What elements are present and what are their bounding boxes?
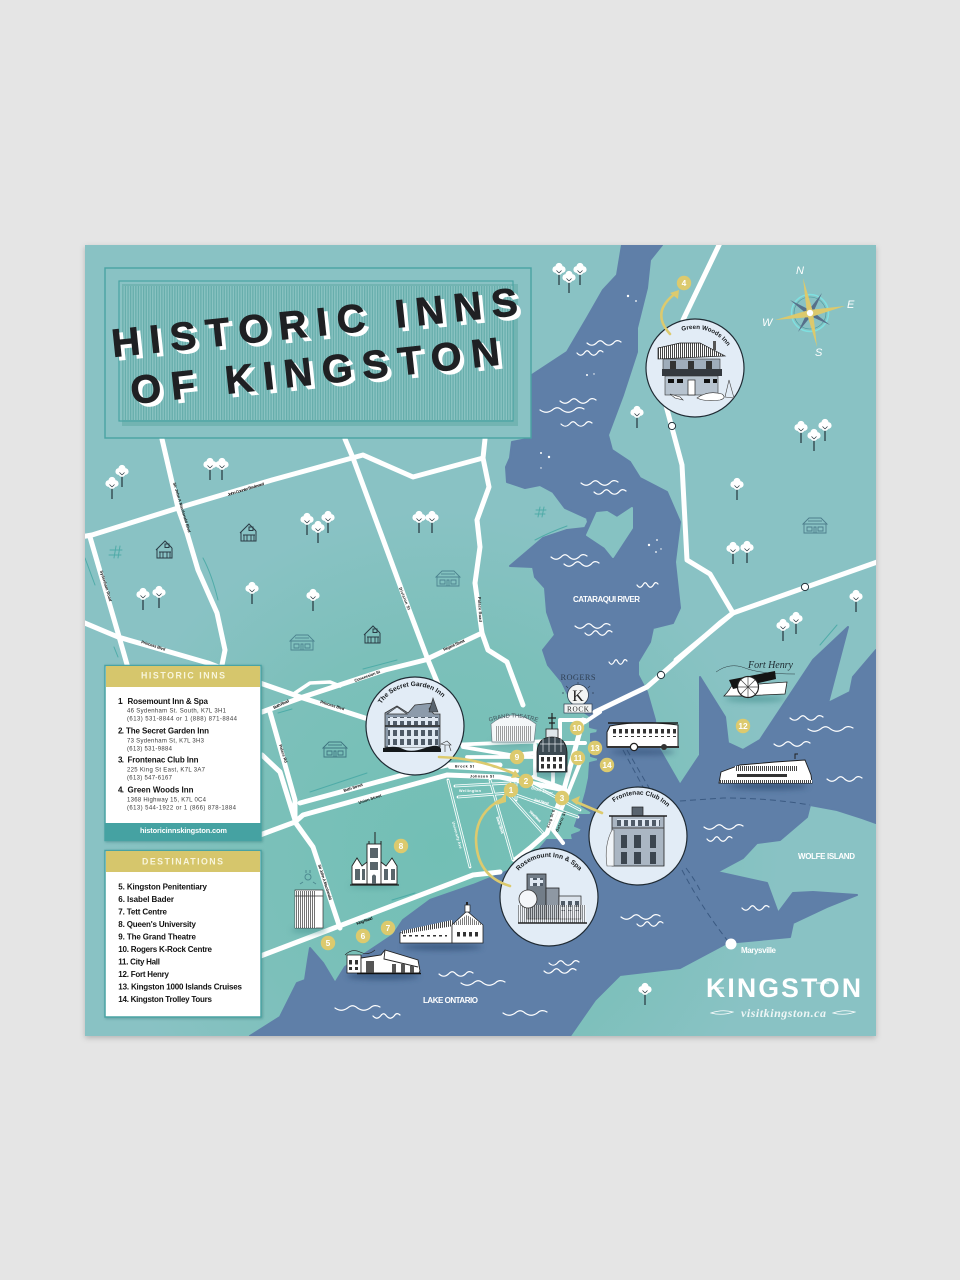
- destination entries: 12. Fort Henry: [118, 970, 170, 979]
- road labels: Sir John A Macdonald: [317, 864, 333, 901]
- panel header: DESTINATIONS: [142, 856, 223, 866]
- compass rose: [762, 265, 855, 359]
- place labels: [423, 595, 855, 1005]
- road network: [80, 243, 880, 957]
- inn entries: 3.: [118, 756, 124, 765]
- building: Kingston Penitentiary: [291, 870, 327, 933]
- icon: Rogers K-Rock Centre logo: [560, 673, 596, 714]
- destination entries: 14. Kingston Trolley Tours: [118, 995, 213, 1004]
- numbered location badges: 12: [738, 721, 748, 731]
- callout circle: Green Woods Inn: Green Woods Inn: [682, 325, 730, 346]
- inn entries: (613) 544-1922 or 1 (866) 878-1884: [127, 805, 237, 811]
- destination entries: 10. Rogers K-Rock Centre: [118, 945, 213, 954]
- callout circle: The Secret Garden Inn: [365, 676, 465, 776]
- inn entries: 225 King St East, K7L 3A7: [127, 767, 206, 773]
- road shields: [657, 422, 809, 679]
- inn entries: (613) 531-9884: [127, 746, 173, 752]
- title text: HISTORIC INNS: [109, 280, 520, 366]
- numbered location badges: 8: [399, 841, 404, 851]
- numbered location badges: 11: [574, 753, 583, 763]
- road labels: John Counter Boulevard: [227, 481, 265, 497]
- icon: Rogers K-Rock Centre logo: ROGERS: [560, 673, 596, 682]
- gold arrows: [439, 293, 676, 886]
- narrow downtown streets: [448, 780, 580, 867]
- destination entries: 6. Isabel Bader: [118, 895, 174, 904]
- place labels: WOLFE ISLAND: [798, 852, 855, 861]
- water waves: [335, 295, 862, 1018]
- destination entries: [118, 883, 243, 1004]
- road labels: Princess Blvd: [141, 639, 167, 652]
- numbered location badges: 6: [361, 931, 366, 941]
- road labels: Johnson St: [470, 774, 495, 778]
- compass rose: N: [796, 265, 804, 277]
- illustration: Fort Henry cannon: [716, 660, 795, 702]
- callout circle: Frontenac Club Inn: [588, 786, 688, 886]
- inn entries: [118, 697, 238, 811]
- poster map: [82, 244, 878, 1040]
- downtown street labels: Earl Street: [534, 798, 550, 806]
- destination entries: 11. City Hall: [118, 958, 160, 966]
- road labels: Sir John A Macdonald Blvd: [172, 482, 192, 534]
- water: Cataraqui River, Lake Ontario and St. Lawrence: [250, 245, 876, 1036]
- icon: Rogers K-Rock Centre logo: ROCK: [567, 706, 590, 714]
- destination entries: 7. Tett Centre: [118, 908, 168, 916]
- callout circle: Rosemount Inn and Spa: Rosemount Inn & Spa: [516, 852, 581, 871]
- title text shadow: OF KINGSTON: [132, 333, 506, 416]
- road labels: Brock St: [455, 764, 475, 768]
- callout circle: Frontenac Club Inn: Frontenac Club Inn: [612, 791, 670, 807]
- Kingston logo: KINGSTON: [706, 973, 861, 1003]
- road labels: Bath Road: [272, 698, 290, 710]
- title text shadow: HISTORIC INNS: [113, 284, 524, 369]
- inn entries: (613) 547-6167: [127, 775, 173, 781]
- numbered location badges: [321, 276, 750, 950]
- numbered location badges: 13: [590, 743, 600, 753]
- building: City Hall: [533, 713, 569, 776]
- numbered location badges: 3: [560, 793, 565, 803]
- inn entries: Frontenac Club Inn: [128, 756, 199, 765]
- title panel: [105, 268, 531, 438]
- trees: [105, 263, 863, 1005]
- title text shadow: [113, 284, 524, 416]
- panel header: [106, 851, 260, 872]
- panel footer: website: [105, 823, 261, 840]
- road labels: Palace Road: [477, 597, 483, 623]
- ferry dashed routes: [623, 750, 810, 940]
- compass rose: S: [815, 347, 823, 359]
- title text: [109, 280, 520, 413]
- place labels: LAKE ONTARIO: [423, 996, 478, 1005]
- road labels: Bath Street: [343, 782, 364, 793]
- icon: Rogers K-Rock Centre logo: K: [572, 688, 584, 705]
- panel header: [106, 666, 260, 687]
- building: Grand Theatre: [488, 714, 538, 746]
- land: [185, 594, 684, 1036]
- road labels: Division St: [398, 587, 412, 611]
- Kingston logo: [708, 978, 860, 1020]
- place labels: Marysville: [741, 946, 777, 955]
- downtown street labels: Wellington: [459, 789, 482, 793]
- inn entries: The Secret Garden Inn: [126, 727, 209, 736]
- arrowheads: [496, 290, 679, 805]
- building: Queen's University: [349, 832, 399, 888]
- road labels: Concession St: [354, 669, 381, 683]
- downtown street labels: University Ave: [451, 821, 463, 849]
- panel footer: website: historicinnskingston.com: [140, 826, 227, 835]
- Kingston logo: visitkingston.ca: [741, 1006, 826, 1020]
- numbered location badges: 4: [682, 278, 687, 288]
- numbered location badges: 5: [326, 938, 331, 948]
- downtown street labels: Brock Street: [531, 786, 554, 796]
- inn entries: 4.: [118, 786, 124, 795]
- downtown street labels: [451, 786, 554, 849]
- destination entries: 5. Kingston Penitentiary: [118, 883, 208, 892]
- place labels: CATARAQUI RIVER: [573, 595, 640, 604]
- numbered location badges: 9: [515, 752, 520, 762]
- building: Grand Theatre: GRAND THEATRE: [488, 714, 538, 722]
- road labels: Regent Street: [442, 638, 466, 652]
- destination entries: 9. The Grand Theatre: [118, 932, 197, 942]
- inn entries: Rosemount Inn & Spa: [128, 697, 209, 706]
- destination entries: 13. Kingston 1000 Islands Cruises: [118, 982, 243, 992]
- numbered location badges: 7: [386, 923, 391, 933]
- river island: [587, 508, 632, 557]
- inn entries: 73 Sydenham St, K7L 3H3: [127, 738, 205, 744]
- numbered location badges: 2: [524, 776, 529, 786]
- callout circle: Green Woods Inn: [645, 318, 745, 418]
- title text: OF KINGSTON: [128, 330, 502, 413]
- downtown street labels: Barrie Street: [495, 816, 505, 835]
- illustration: cruise boat: [719, 754, 812, 790]
- callout circle: Rosemount Inn and Spa: [499, 847, 599, 947]
- inn entries: Green Woods Inn: [128, 786, 194, 795]
- road labels: Palace Rd: [278, 744, 289, 764]
- panel: Destinations list: [105, 850, 261, 1017]
- downtown street labels: West Street: [528, 810, 542, 824]
- road labels: Ontario St: [555, 811, 567, 832]
- building: trolley: [607, 723, 679, 755]
- building: Isabel Bader: [345, 950, 421, 980]
- numbered location badges: 10: [572, 723, 582, 733]
- inn entries: (613) 531-8844 or 1 (888) 871-8844: [127, 717, 238, 723]
- inn entries: 1368 Highway 15, K7L 0C4: [127, 797, 207, 803]
- panel header: HISTORIC INNS: [141, 671, 225, 681]
- callout circle: The Secret Garden Inn: The Secret Garden Inn: [378, 682, 444, 703]
- grass marks: [85, 507, 837, 900]
- road labels: King St E: [546, 808, 556, 828]
- small houses: [156, 518, 827, 757]
- inn entries: 46 Sydenham St. South, K7L 3H1: [127, 709, 227, 715]
- numbered location badges: 14: [602, 760, 612, 770]
- building: Tett Centre: [400, 902, 483, 950]
- illustration: Fort Henry cannon: Fort Henry: [747, 660, 794, 671]
- road labels: [99, 481, 567, 926]
- compass rose: W: [762, 317, 774, 329]
- road labels: Union Street: [358, 793, 383, 805]
- road labels: King Road: [356, 915, 374, 926]
- destination entries: 8. Queen's University: [118, 920, 197, 929]
- panel: Historic Inns list: [105, 666, 261, 840]
- inn entries: 1.: [118, 697, 123, 706]
- inn entries: 2.: [118, 727, 124, 736]
- numbered location badges: 1: [509, 785, 514, 795]
- compass rose: E: [847, 299, 855, 311]
- road labels: Sydenham Road: [99, 570, 113, 602]
- road labels: Princess Blvd: [320, 699, 346, 711]
